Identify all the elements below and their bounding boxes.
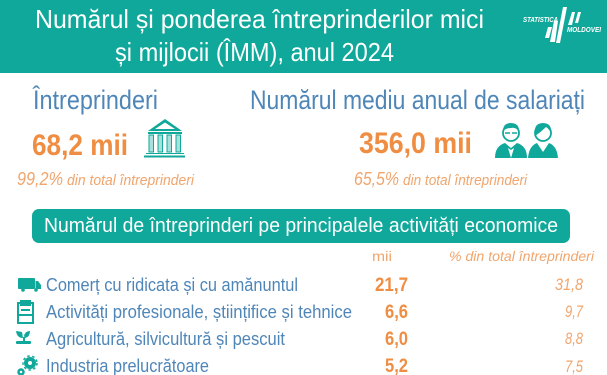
icon: seedling — [16, 331, 31, 344]
section heading pill — [32, 209, 570, 243]
logo: Statistica Moldovei — [523, 7, 602, 43]
panel: enterprises — [17, 84, 195, 189]
row: trade: 21,7 — [375, 275, 408, 296]
row: manufacturing — [18, 356, 583, 375]
row: agriculture: 8,8 — [565, 329, 583, 348]
table column headers: mii — [372, 248, 392, 264]
panel: employees — [250, 85, 585, 189]
icon: institution building — [144, 119, 185, 158]
row: agriculture: 6,0 — [385, 329, 408, 350]
share: employees: din total întreprinderi — [403, 172, 528, 189]
row: professional activities — [18, 301, 583, 323]
section heading pill: Numărul de întreprinderi pe principalele activități economice — [44, 215, 558, 237]
row: agriculture — [16, 329, 583, 350]
icon: truck — [18, 278, 41, 292]
heading: enterprises: Întreprinderi — [32, 84, 158, 115]
table column headers — [372, 248, 595, 264]
icon: gears — [18, 356, 37, 374]
row: trade — [18, 275, 583, 296]
header band — [0, 0, 607, 73]
row: professional activities: 6,6 — [385, 302, 408, 323]
title — [35, 4, 484, 67]
icon: employees — [495, 123, 558, 158]
row: professional activities: 9,7 — [565, 302, 583, 321]
row: trade: 31,8 — [555, 275, 583, 294]
table column headers: % din total întreprinderi — [449, 248, 595, 264]
icon: clipboard — [18, 301, 33, 323]
share: employees: 65,5% — [354, 169, 399, 189]
title: și mijlocii (ÎMM), anul 2024 — [115, 37, 394, 67]
value: 356,0 thousand: 356,0 mii — [359, 127, 472, 160]
row: trade: Comerț cu ridicata și cu amănuntul — [46, 275, 298, 295]
share: employees — [354, 169, 528, 189]
value: 68,2 thousand: 68,2 mii — [32, 129, 128, 162]
logo: Statistica Moldovei: STATISTICA — [523, 17, 558, 24]
share: enterprises — [17, 169, 195, 189]
logo: Statistica Moldovei: MOLDOVEI — [567, 27, 602, 34]
share: enterprises: 99,2% — [17, 169, 63, 189]
row: professional activities: Activități profesionale, științifice și tehnice — [46, 302, 352, 322]
share: enterprises: din total întreprinderi — [67, 172, 195, 189]
row: agriculture: Agricultură, silvicultură și pescuit — [46, 329, 285, 349]
title: Numărul și ponderea întreprinderilor mici — [35, 4, 484, 34]
